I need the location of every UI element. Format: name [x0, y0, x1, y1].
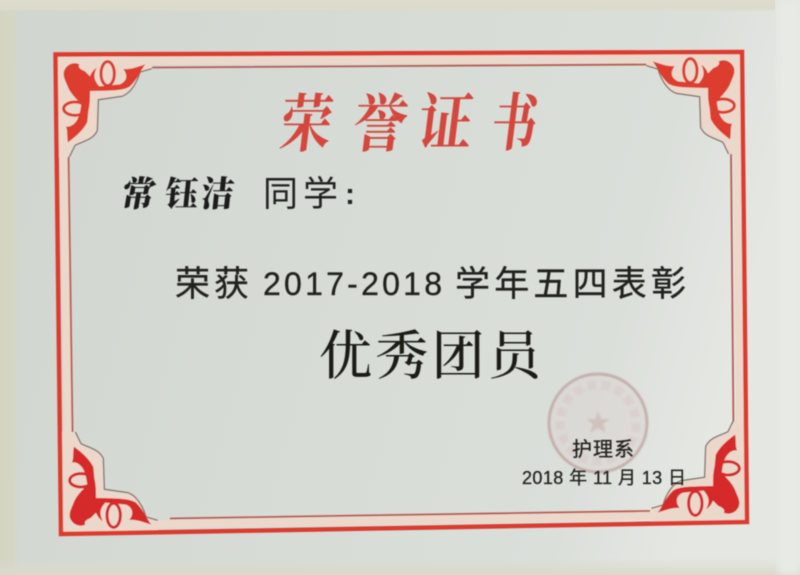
- red decorative border: [55, 51, 748, 535]
- department: 护理系: [572, 438, 634, 461]
- official stamp: [549, 374, 647, 472]
- title: 誉: [349, 89, 412, 160]
- outer border line: [56, 52, 747, 534]
- recipient name: 钰: [163, 175, 202, 214]
- title: 证: [414, 88, 477, 159]
- award statement: 学年五四表彰: [455, 265, 686, 304]
- recipient name: [119, 175, 236, 214]
- pale band of border: [64, 58, 740, 525]
- award statement: 荣获: [175, 265, 249, 304]
- corner ornament: top right: [646, 51, 743, 154]
- salutation: [263, 175, 355, 214]
- corner ornament: bottom right: [651, 420, 748, 523]
- salutation: :: [345, 178, 355, 211]
- award statement: [175, 265, 686, 304]
- salutation: 同: [263, 175, 298, 214]
- inner border line: [68, 64, 734, 518]
- award statement: 2017-2018: [263, 266, 442, 302]
- issue date: 2018 年 11 月 13 日: [522, 468, 686, 488]
- salutation: 学: [303, 175, 338, 214]
- title: 书: [487, 89, 543, 159]
- recipient name: 常: [119, 175, 159, 214]
- corner ornament: top left: [55, 54, 152, 157]
- title: 荣: [276, 89, 337, 160]
- title: [276, 88, 543, 160]
- corner ornament: bottom left: [61, 432, 158, 535]
- honor name: 优秀团员: [319, 328, 546, 386]
- recipient name: 洁: [199, 175, 236, 214]
